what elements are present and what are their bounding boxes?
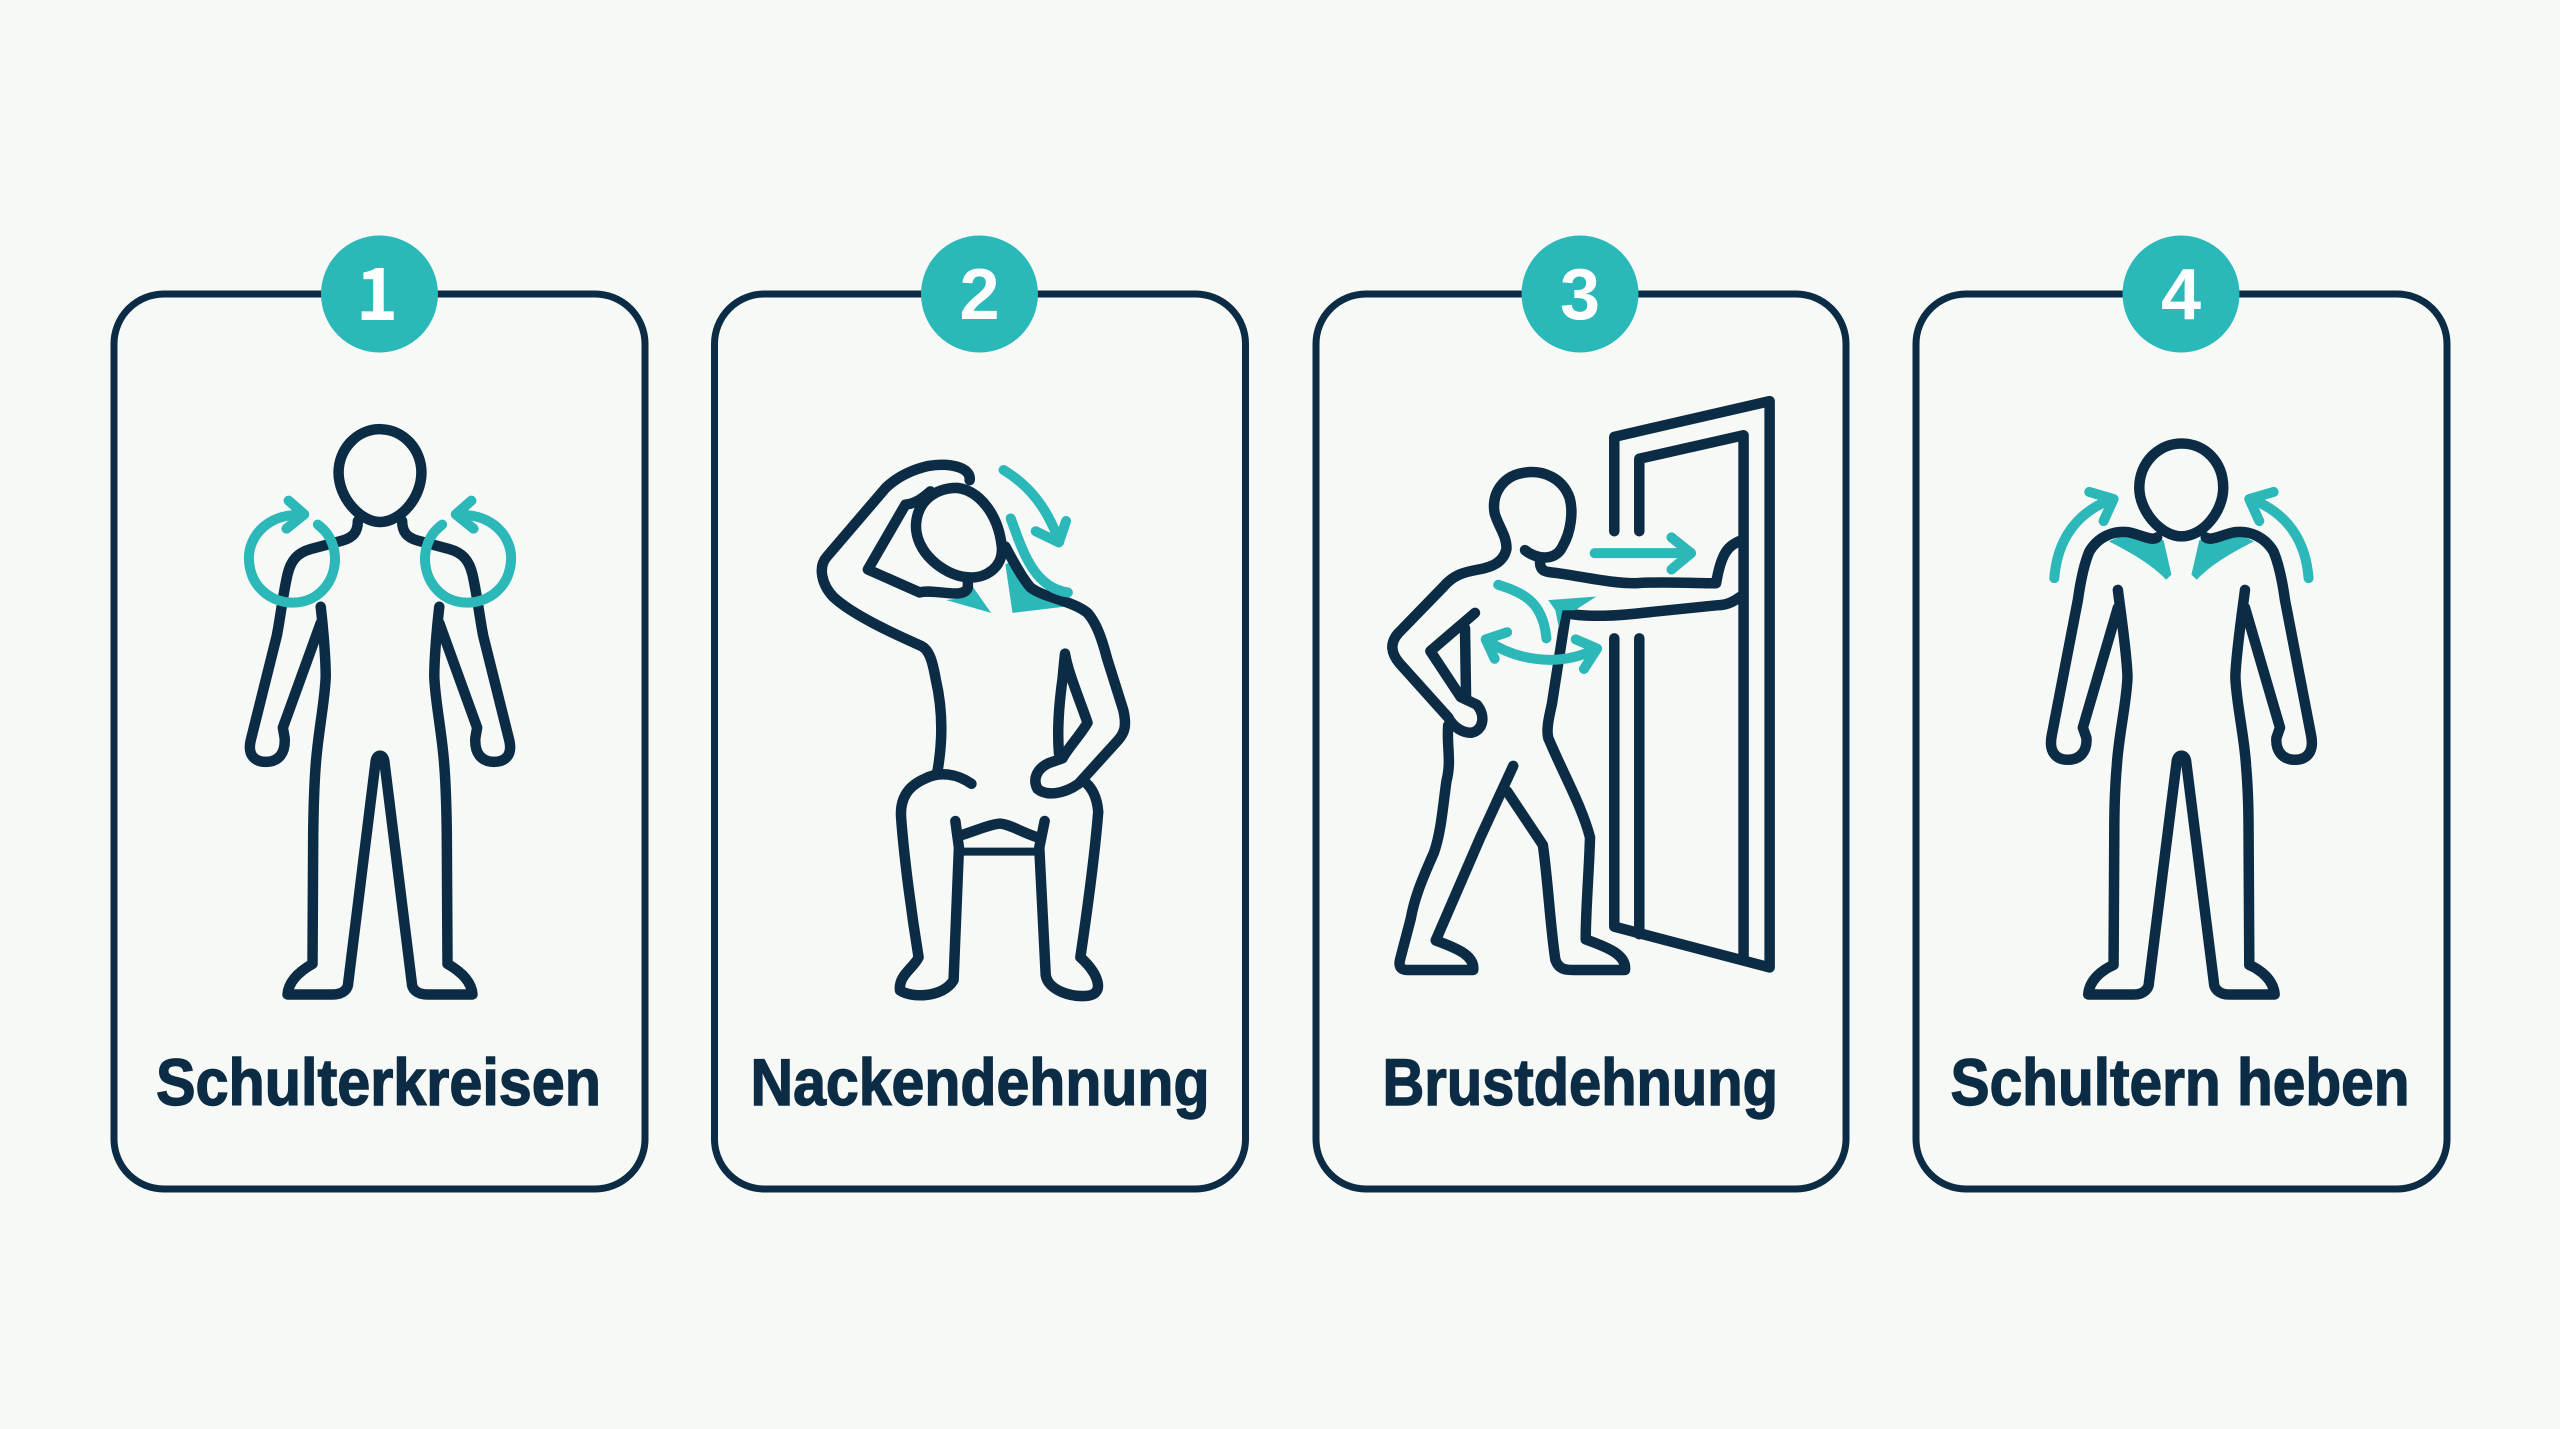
number badge 2 xyxy=(921,236,1038,352)
number badge 4: 4 xyxy=(2161,255,2201,335)
figure: standing person with shoulder circles xyxy=(249,429,511,994)
number badge 3 xyxy=(1522,236,1638,352)
figure: seated person with neck stretch xyxy=(822,465,1125,996)
panel 1: Schulterkreisen xyxy=(114,236,645,1189)
number badge 1: 1 xyxy=(356,236,398,341)
card frame 2 xyxy=(714,294,1246,1189)
panel 2: Nackendehnung xyxy=(714,236,1246,1189)
label 3: Brustdehnung xyxy=(1382,1045,1778,1119)
label 2: Nackendehnung xyxy=(750,1045,1210,1119)
number badge 3: 3 xyxy=(1560,255,1600,335)
number badge 4 xyxy=(2122,236,2240,352)
figure: standing person raising shoulders xyxy=(2051,443,2312,994)
panel 4: Schultern heben xyxy=(1916,236,2447,1189)
panel 3: Brustdehnung xyxy=(1316,236,1846,1189)
label 4: Schultern heben xyxy=(1950,1045,2410,1119)
card frame 3 xyxy=(1316,294,1846,1189)
label 1: Schulterkreisen xyxy=(156,1045,601,1119)
number badge 2: 2 xyxy=(959,255,1000,335)
card frame 4 xyxy=(1916,294,2447,1189)
card frame 1 xyxy=(114,294,645,1189)
figure: person stretching in a doorway xyxy=(1392,401,1770,970)
number badge 1 xyxy=(321,236,438,352)
